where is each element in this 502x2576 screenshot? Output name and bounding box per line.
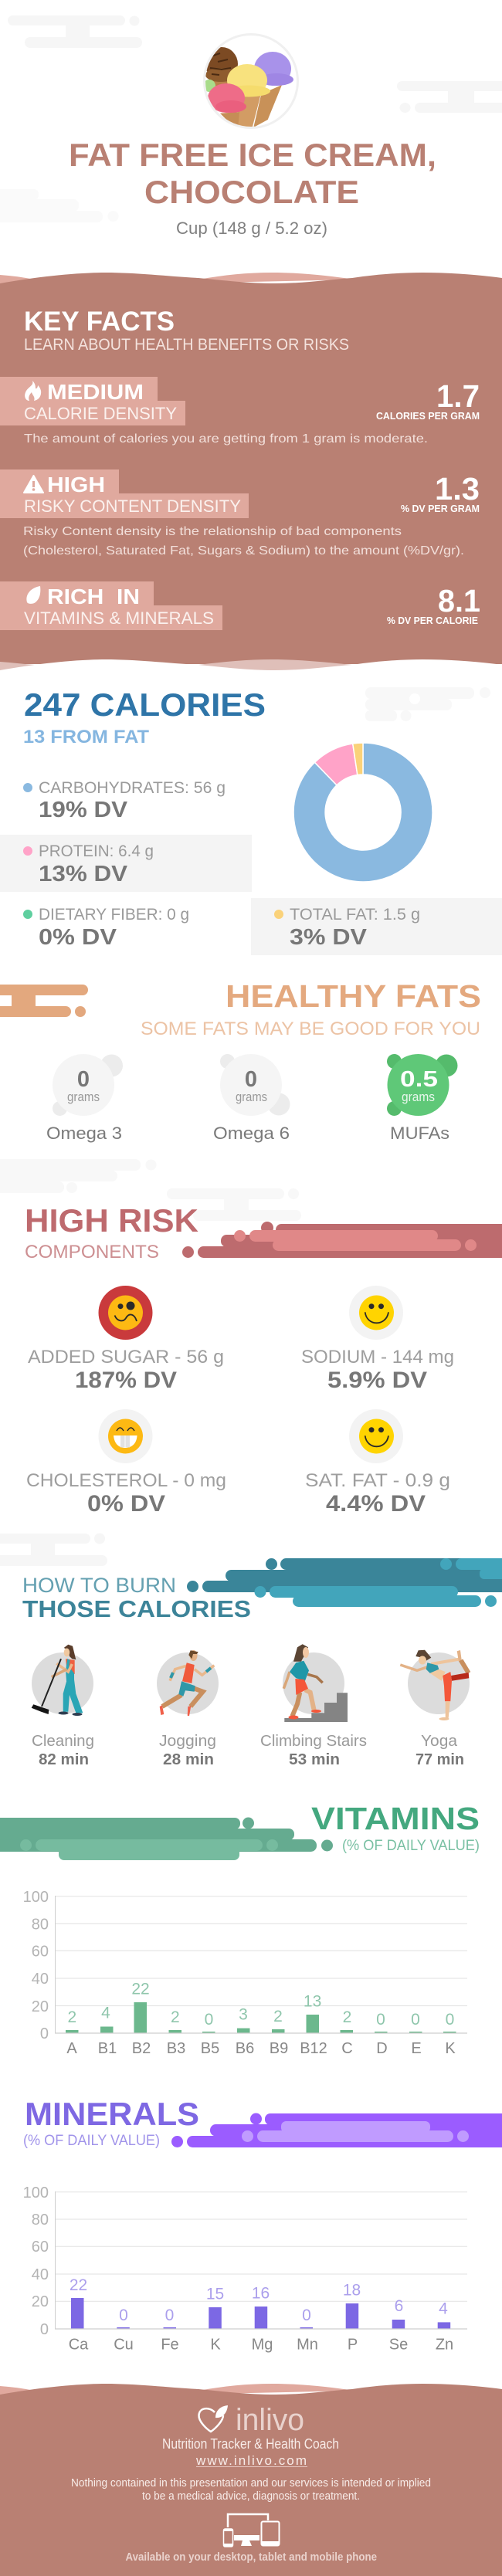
bar chart: minerals: 0 <box>165 2307 174 2324</box>
title: FAT FREE ICE CREAM, <box>69 137 436 173</box>
bar chart: vitamins: A <box>66 2040 77 2057</box>
bar chart: vitamins: 80 <box>32 1917 49 1934</box>
bar chart: minerals: K <box>210 2337 221 2354</box>
bar chart: vitamins: B3 <box>167 2040 185 2057</box>
heading: vitamins: VITAMINS <box>311 1801 480 1836</box>
bar chart: minerals: 0 <box>302 2307 311 2324</box>
bar chart: vitamins: 2 <box>67 2008 76 2026</box>
heading: high risk: COMPONENTS <box>25 1242 159 1263</box>
risk: cholesterol <box>26 1409 226 1517</box>
logo: inlivo <box>198 2403 304 2437</box>
bar chart: vitamins: 2 <box>273 2008 283 2025</box>
heading: minerals: MINERALS <box>25 2096 199 2132</box>
fact: risky content density: 1.3 <box>435 471 480 507</box>
fat: omega 3: 0 <box>77 1067 90 1092</box>
macro: protein: PROTEIN: 6.4 g <box>39 842 154 860</box>
disclaimer <box>71 2476 431 2503</box>
bar chart: minerals: 40 <box>32 2266 49 2283</box>
bar chart: minerals: 6 <box>395 2297 403 2315</box>
bar chart: minerals: 20 <box>32 2293 49 2310</box>
icon: warning <box>24 476 43 493</box>
macro list <box>0 779 502 955</box>
bar chart: minerals: 16 <box>252 2285 270 2303</box>
bar chart: vitamins <box>23 1889 467 2057</box>
fact: risky content density <box>0 469 480 558</box>
fat: omega 3 <box>46 1054 123 1143</box>
tagline: Nutrition Tracker & Health Coach <box>162 2436 339 2452</box>
macro: dietary fiber: DIETARY FIBER: 0 g <box>39 906 189 924</box>
risk: saturated fat: 4.4% DV <box>326 1491 426 1517</box>
fact: rich in vitamins and minerals: RICH IN <box>47 585 140 608</box>
fat: omega 6 <box>213 1054 290 1143</box>
website link: www.inlivo.com <box>195 2453 307 2468</box>
bar chart: minerals <box>23 2185 467 2354</box>
heading: calories <box>23 686 266 747</box>
bar chart: vitamins: B12 <box>300 2040 327 2057</box>
heading: calories: 13 FROM FAT <box>23 727 149 747</box>
banner: healthy fats stripe <box>0 985 88 1017</box>
fact: calorie density: CALORIE DENSITY <box>24 404 177 423</box>
bar chart: minerals: Fe <box>161 2337 179 2354</box>
bar chart: vitamins: 3 <box>239 2006 248 2024</box>
risk: added sugar: 187% DV <box>75 1368 177 1393</box>
title <box>69 137 436 210</box>
availability note: Available on your desktop, tablet and mobile phone <box>125 2551 377 2564</box>
bar chart: minerals: 100 <box>23 2185 49 2201</box>
macro: protein: 13% DV <box>39 862 128 886</box>
bar chart: vitamins: 2 <box>343 2008 351 2026</box>
activity: climbing stairs: 53 min <box>289 1751 340 1768</box>
bar chart: vitamins: B5 <box>201 2040 219 2057</box>
logo: inlivo: inlivo <box>236 2403 304 2437</box>
activity: jogging <box>157 1650 219 1768</box>
bar chart: minerals: 18 <box>343 2282 361 2300</box>
bar chart: vitamins: 2 <box>171 2008 180 2026</box>
bar chart: vitamins: 100 <box>23 1889 49 1906</box>
risk: saturated fat <box>305 1409 450 1517</box>
risk: sodium <box>301 1286 454 1393</box>
activity: yoga: 77 min <box>416 1751 464 1768</box>
bar chart: vitamins: 0 <box>376 2011 385 2029</box>
activity: cleaning: Cleaning <box>32 1733 94 1750</box>
risk: added sugar: ADDED SUGAR - 56 g <box>28 1347 224 1368</box>
bar chart: vitamins: 0 <box>446 2011 454 2029</box>
fact: rich in vitamins and minerals <box>0 581 480 630</box>
macro: total fat <box>274 906 420 950</box>
risk: sodium: 5.9% DV <box>327 1368 427 1393</box>
macro: total fat: TOTAL FAT: 1.5 g <box>290 906 420 924</box>
activity: jogging: 28 min <box>163 1751 214 1768</box>
fat: mufas: 0.5 <box>400 1067 438 1092</box>
heading: healthy fats <box>141 978 481 1039</box>
food image: ice cream cones <box>203 34 298 128</box>
banner: minerals stripe <box>171 2113 502 2147</box>
bar chart: vitamins: K <box>445 2040 456 2057</box>
banner: vitamins stripe <box>0 1818 333 1860</box>
bar chart: vitamins: B1 <box>98 2040 117 2057</box>
risk: added sugar <box>28 1286 224 1393</box>
heading: healthy fats: SOME FATS MAY BE GOOD FOR YOU <box>141 1019 480 1039</box>
fact: risky content density: Risky Content density is the relationship of bad components <box>23 525 402 538</box>
activity: climbing stairs: Climbing Stairs <box>260 1733 367 1750</box>
bar chart: minerals: 60 <box>32 2239 49 2256</box>
activity: cleaning <box>32 1645 94 1768</box>
activity: yoga: Yoga <box>421 1733 458 1750</box>
bar chart: minerals: Mn <box>297 2337 318 2354</box>
activity: cleaning: 82 min <box>39 1751 89 1768</box>
bar chart: vitamins: E <box>411 2040 422 2057</box>
banner: high risk stripe <box>182 1222 502 1258</box>
macro: carbohydrates <box>23 779 226 822</box>
bar chart: minerals: Zn <box>436 2337 453 2354</box>
bar chart: vitamins: 13 <box>304 1993 321 2011</box>
title: CHOCOLATE <box>144 174 359 210</box>
fact: risky content density: (Cholesterol, Saturated Fat, Sugars & Sodium) to the amount (%DV/gr). <box>23 544 464 558</box>
heading: healthy fats: HEALTHY FATS <box>226 978 481 1014</box>
heading: vitamins: (% OF DAILY VALUE) <box>342 1838 480 1854</box>
disclaimer: Nothing contained in this presentation and our services is intended or implied <box>71 2476 431 2490</box>
heading: minerals: (% OF DAILY VALUE) <box>23 2133 160 2149</box>
fat: omega 6: 0 <box>245 1067 257 1092</box>
banner: burn calories stripe <box>187 1558 502 1607</box>
risk: cholesterol: 0% DV <box>87 1491 165 1517</box>
icon: leaf <box>26 586 40 604</box>
icon: flame <box>25 381 41 401</box>
fat: omega 3: grams <box>67 1090 100 1104</box>
macro: protein <box>23 842 154 886</box>
key facts heading: LEARN ABOUT HEALTH BENEFITS OR RISKS <box>24 336 349 354</box>
bar chart: vitamins: 22 <box>131 1980 150 1998</box>
fact: calorie density <box>0 377 480 446</box>
macro: carbohydrates: 19% DV <box>39 798 128 822</box>
fact: calorie density: MEDIUM <box>47 380 144 404</box>
risk: saturated fat: SAT. FAT - 0.9 g <box>305 1470 450 1491</box>
heading: how to burn those calories: HOW TO BURN <box>22 1574 176 1597</box>
panel: key facts <box>0 273 502 664</box>
serving size: Cup (148 g / 5.2 oz) <box>176 219 327 238</box>
macro: carbohydrates: CARBOHYDRATES: 56 g <box>39 779 226 797</box>
fact: risky content density: % DV PER GRAM <box>401 503 480 514</box>
bar chart: vitamins: B2 <box>132 2040 151 2057</box>
fat: omega 3: Omega 3 <box>46 1124 122 1143</box>
bar chart: minerals: Se <box>389 2337 408 2354</box>
bar chart: minerals: 0 <box>40 2321 49 2338</box>
bar chart: minerals: 15 <box>206 2286 224 2303</box>
key facts heading <box>24 307 349 354</box>
bar chart: vitamins: 20 <box>32 1998 49 2015</box>
heading: vitamins <box>311 1801 480 1854</box>
risk: sodium: SODIUM - 144 mg <box>301 1347 454 1368</box>
heading: minerals <box>23 2096 199 2149</box>
bar chart: minerals: P <box>348 2337 358 2354</box>
activity: jogging: Jogging <box>159 1733 216 1750</box>
bar chart: vitamins: C <box>341 2040 353 2057</box>
fact: calorie density: The amount of calories you are getting from 1 gram is moderate. <box>24 432 428 446</box>
heading: high risk: HIGH RISK <box>25 1202 198 1239</box>
activity: yoga <box>400 1650 470 1768</box>
fact: rich in vitamins and minerals: 8.1 <box>438 583 480 619</box>
bar chart: minerals: 0 <box>119 2307 128 2324</box>
bar chart: vitamins: 4 <box>101 2005 110 2022</box>
fat: omega 6: Omega 6 <box>213 1124 290 1143</box>
bar chart: vitamins: B6 <box>236 2040 254 2057</box>
bar chart: minerals: 22 <box>70 2276 87 2294</box>
fact: risky content density: HIGH <box>47 473 105 497</box>
donut chart <box>293 743 432 882</box>
macro: dietary fiber: 0% DV <box>39 925 117 950</box>
fact: risky content density: RISKY CONTENT DENSITY <box>24 497 241 516</box>
bar chart: minerals: 4 <box>439 2300 448 2318</box>
fat: omega 6: grams <box>236 1090 267 1104</box>
fat: mufas <box>387 1054 457 1143</box>
macro: dietary fiber <box>23 906 189 950</box>
bar chart: vitamins: 40 <box>32 1971 49 1988</box>
heading: calories: 247 CALORIES <box>24 686 266 723</box>
macro: total fat: 3% DV <box>290 925 368 950</box>
icon: devices <box>224 2514 280 2547</box>
bar chart: minerals: Mg <box>252 2337 273 2354</box>
activity: climbing stairs <box>260 1644 367 1768</box>
bar chart: vitamins: D <box>376 2040 388 2057</box>
bar chart: vitamins: 0 <box>205 2011 213 2029</box>
heading: how to burn those calories <box>22 1574 251 1622</box>
bar chart: vitamins: 0 <box>411 2011 420 2029</box>
panel: footer <box>0 2384 502 2576</box>
fat: mufas: grams <box>402 1090 435 1104</box>
bar chart: vitamins: 60 <box>32 1944 49 1961</box>
bar chart: vitamins: B9 <box>270 2040 288 2057</box>
fact: calorie density: 1.7 <box>436 378 480 414</box>
bar chart: minerals: Ca <box>69 2337 89 2354</box>
bar chart: minerals: Cu <box>114 2337 134 2354</box>
bar chart: minerals: 80 <box>32 2212 49 2229</box>
risk: cholesterol: CHOLESTEROL - 0 mg <box>26 1470 226 1491</box>
key facts heading: KEY FACTS <box>24 307 175 337</box>
heading: high risk <box>25 1202 198 1263</box>
fact: rich in vitamins and minerals: VITAMINS & MINERALS <box>24 608 214 628</box>
bar chart: vitamins: 0 <box>40 2025 49 2042</box>
disclaimer: to be a medical advice, diagnosis or treatment. <box>142 2490 360 2503</box>
fat: mufas: MUFAs <box>390 1124 449 1143</box>
fact: calorie density: CALORIES PER GRAM <box>376 410 480 422</box>
heading: how to burn those calories: THOSE CALORIES <box>22 1595 251 1622</box>
fact: rich in vitamins and minerals: % DV PER CALORIE <box>387 615 478 626</box>
